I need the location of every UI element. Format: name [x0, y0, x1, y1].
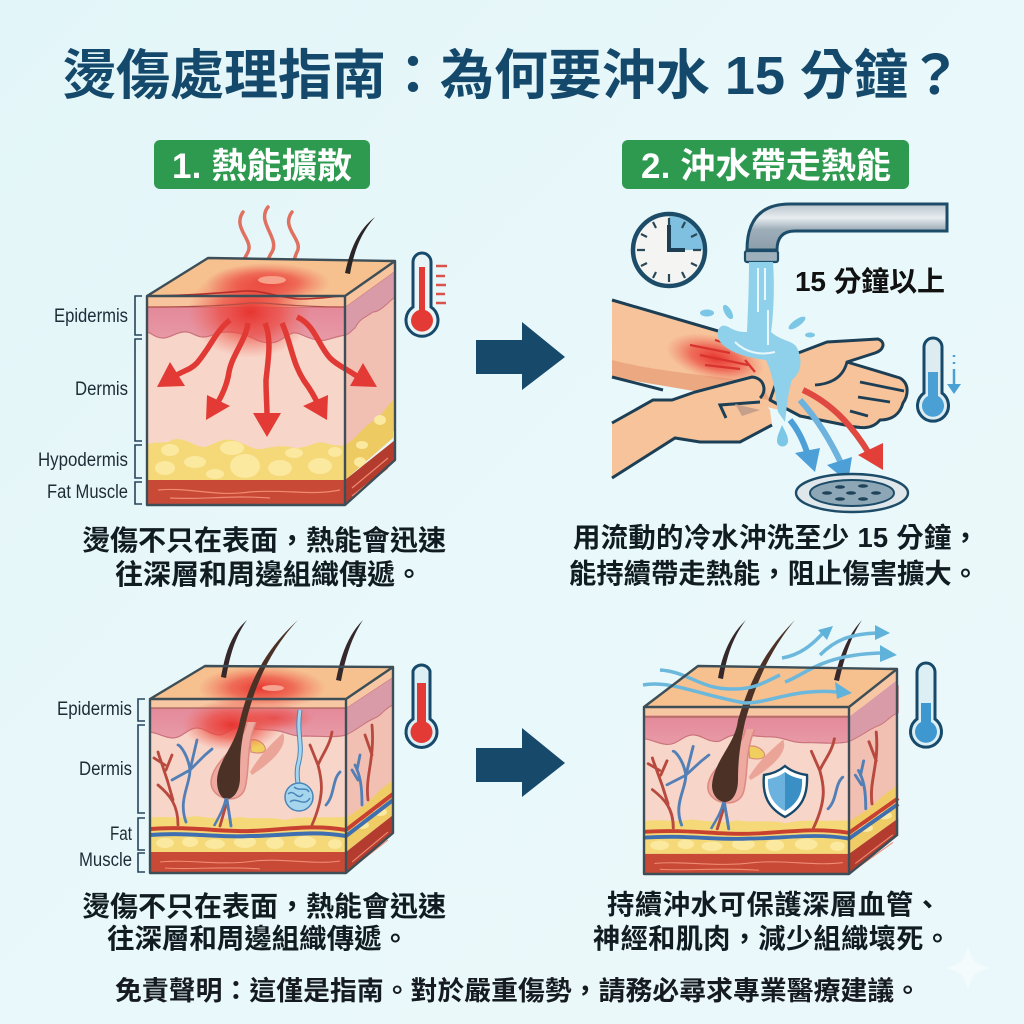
top face [150, 666, 393, 699]
burn glow [182, 666, 326, 751]
icon: hot thermometer [406, 253, 447, 336]
caption: top left: 燙傷不只在表面，熱能會迅速 [82, 525, 446, 556]
labels: skin layers, lower: Muscle [79, 850, 132, 871]
icon: shield [764, 766, 807, 817]
muscle fibres [158, 458, 388, 498]
icon: cooling thermometer [918, 338, 961, 421]
right face dermis [345, 271, 395, 470]
surface crease [147, 291, 345, 299]
skin structure [644, 686, 898, 874]
follicle [211, 722, 256, 799]
caption: lower right [593, 889, 951, 954]
water drops [700, 303, 815, 447]
heading: step 2 [622, 140, 909, 189]
heading: step 2: 2. 沖水帶走熱能 [641, 147, 891, 186]
heading: step 1 [154, 140, 370, 189]
arrow: lower [476, 728, 565, 797]
outgoing arrows [790, 390, 883, 482]
sebaceous gland and muscle [250, 740, 265, 753]
icon: steam [240, 207, 298, 266]
right hand [770, 339, 907, 428]
band lines [150, 699, 346, 708]
skin structure [150, 667, 393, 873]
right band [849, 669, 897, 717]
caption: top right: 用流動的冷水沖洗至少 15 分鐘， [573, 522, 979, 553]
caption: top right: 能持續帶走熱能，阻止傷害擴大。 [569, 558, 979, 589]
labels: skin layers, lower: Fat [110, 824, 133, 845]
big hair [712, 620, 795, 802]
cooling airflow arrows [643, 625, 897, 703]
caption: lower right: 神經和肌肉，減少組織壞死。 [593, 923, 951, 954]
top face [644, 666, 897, 707]
blood vessels [154, 725, 373, 826]
labels: skin layers, top: Epidermis [54, 306, 128, 327]
caption: lower right: 持續沖水可保護深層血管、 [607, 889, 941, 920]
icon: clock [633, 214, 705, 286]
panel: heat spread skin cube [147, 207, 395, 505]
icon: faucet [745, 204, 947, 262]
helping hand [612, 377, 772, 478]
arrow: top [476, 322, 565, 390]
right muscle [345, 440, 395, 505]
dermis [147, 296, 345, 470]
right fat layer [345, 400, 393, 480]
caption: lower left [82, 891, 446, 954]
outline [150, 666, 393, 873]
burn mark [661, 325, 769, 391]
small hairs [221, 620, 363, 681]
right face pink layer [345, 271, 395, 335]
fat globules [155, 415, 386, 479]
heat glow [193, 264, 326, 356]
epidermis pink layer [147, 307, 345, 343]
icon: thermometer, red [406, 665, 437, 747]
big hair [217, 620, 298, 799]
labels: skin layers, top [38, 296, 142, 504]
band lines [644, 707, 849, 717]
icon: thermometer, blue [910, 663, 942, 747]
labels: skin layers, top: Fat Muscle [47, 482, 128, 503]
label: 15 minutes: 15 分鐘以上 [795, 266, 945, 297]
fingers [815, 362, 904, 416]
labels: skin layers, lower: Epidermis [57, 699, 132, 720]
labels: skin layers, lower: Dermis [79, 759, 132, 780]
panel: detailed skin cube, burned [150, 620, 393, 873]
caption: top right [569, 522, 979, 589]
outline [644, 666, 897, 874]
labels: skin layers, top: Hypodermis [38, 450, 128, 471]
muscle layer [147, 480, 345, 505]
hair [345, 217, 375, 274]
panel: detailed skin cube, protected [643, 620, 898, 874]
small hairs [718, 620, 862, 681]
illustration: hands under water [612, 262, 907, 482]
caption: lower left: 往深層和周邊組織傳遞。 [107, 923, 409, 954]
fat layer [147, 439, 345, 480]
caption: lower left: 燙傷不只在表面，熱能會迅速 [82, 891, 446, 922]
right pink fill [849, 680, 897, 735]
sweat gland [285, 710, 313, 811]
water stream [718, 262, 800, 422]
caption: top left [82, 525, 446, 590]
labels: skin layers, lower [57, 699, 145, 872]
caption: top left: 往深層和周邊組織傳遞。 [115, 559, 423, 590]
disclaimer: 免責聲明：這僅是指南。對於嚴重傷勢，請務必尋求專業醫療建議。 [115, 975, 921, 1006]
heat arrows [157, 317, 377, 437]
labels: skin layers, top: Dermis [75, 379, 128, 400]
burned forearm [612, 300, 790, 410]
epidermis band [147, 261, 395, 307]
sparkle watermark [946, 946, 990, 990]
hair roots [214, 798, 231, 826]
cube outline [147, 258, 395, 505]
title: 燙傷處理指南：為何要沖水 15 分鐘？ [62, 46, 962, 106]
heading: step 1: 1. 熱能擴散 [172, 147, 352, 186]
icon: drain [796, 474, 908, 512]
skin top face [147, 258, 395, 296]
